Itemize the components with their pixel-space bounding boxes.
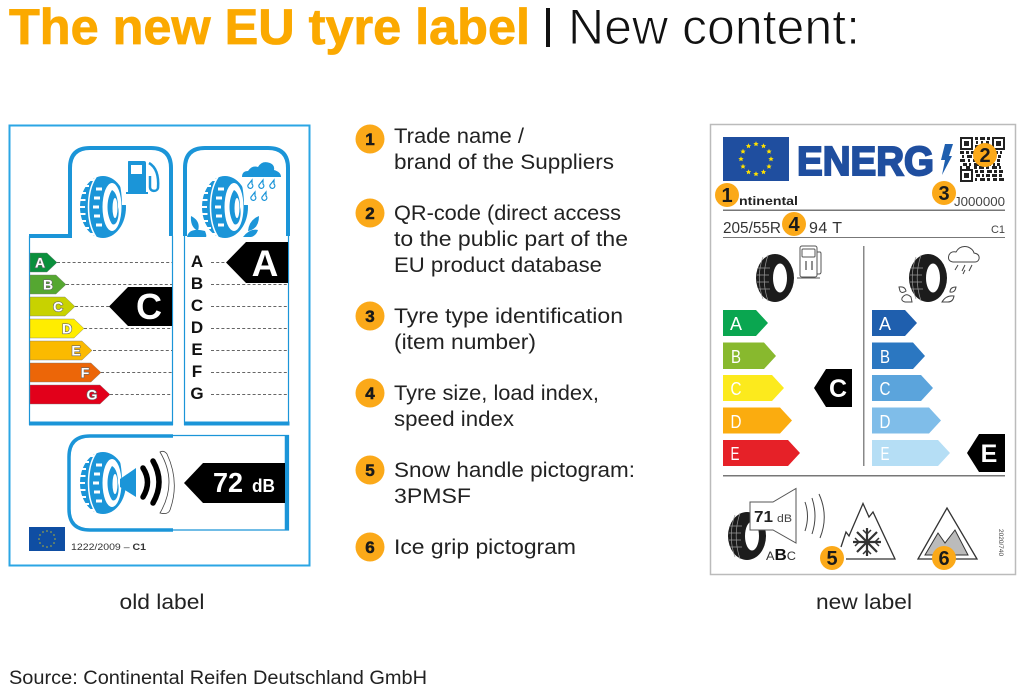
bar C: C xyxy=(53,298,63,314)
item 1: Trade name / xyxy=(394,124,524,148)
item 2: QR-code (direct access xyxy=(394,201,621,225)
bar C: C xyxy=(730,378,742,399)
wet grip scale A-G: A xyxy=(191,252,203,271)
wet grip scale A-E xyxy=(872,310,950,466)
noise rating arrow 72 dB: dB xyxy=(252,476,275,496)
item 1 xyxy=(356,124,614,174)
noise rating arrow 72 dB xyxy=(184,463,285,503)
icon: rain cloud xyxy=(948,247,979,274)
wet grip rating arrow A xyxy=(226,242,288,284)
icon: tyre (fuel) xyxy=(756,254,794,302)
bar B: B xyxy=(731,346,741,367)
bar A xyxy=(723,310,768,336)
icon: tyre (noise) xyxy=(79,450,129,514)
marker 3 xyxy=(932,181,956,205)
tyre size: 205/55R xyxy=(723,220,781,237)
fuel rating arrow C xyxy=(109,286,172,327)
item 5 xyxy=(356,456,635,508)
bar D xyxy=(872,408,941,434)
item 6: Ice grip pictogram xyxy=(394,535,576,559)
icon: fuel pump xyxy=(126,161,158,194)
QR code xyxy=(960,138,1004,181)
caption: new label: new label xyxy=(816,591,912,614)
noise rating arrow 72 dB: 72 xyxy=(213,467,243,498)
bar D xyxy=(30,319,84,338)
bar B: B xyxy=(43,276,53,292)
bar D xyxy=(723,408,792,434)
icon: speaker and sound waves xyxy=(120,451,174,514)
panel: new label xyxy=(710,124,1016,574)
fuel rating arrow C xyxy=(814,369,852,407)
bar A: A xyxy=(730,313,743,334)
fuel efficiency scale A-G xyxy=(30,253,110,404)
title: black part: New content: xyxy=(568,0,860,55)
fuel panel outline xyxy=(29,148,173,425)
marker 4: 4 xyxy=(788,214,800,236)
item 5: 5 xyxy=(365,461,375,480)
item 5: 3PMSF xyxy=(394,484,471,508)
icon: fuel pump xyxy=(797,246,821,278)
title xyxy=(9,0,860,55)
bar C xyxy=(723,375,784,401)
marker 1: 1 xyxy=(721,185,733,207)
bar A: A xyxy=(35,254,45,270)
item 2: to the public part of the xyxy=(394,227,628,251)
bar F: F xyxy=(81,364,90,380)
marker 6: 6 xyxy=(938,548,950,570)
energy wordmark: ENERG xyxy=(797,138,934,184)
bar E xyxy=(30,341,92,360)
bar C xyxy=(30,297,75,316)
marker 6 xyxy=(932,546,956,570)
marker 5 xyxy=(820,546,844,570)
item 3: 3 xyxy=(365,307,375,326)
icon: noise tyre and speaker: dB xyxy=(777,513,792,525)
item 6 xyxy=(356,532,576,562)
bar E: E xyxy=(880,443,890,464)
bar D: D xyxy=(730,411,742,432)
wet grip scale A-G: G xyxy=(190,384,204,403)
EU flag xyxy=(723,137,789,181)
caption: old label: old label xyxy=(120,591,204,614)
wet grip scale A-G: C xyxy=(191,296,203,315)
item 3: (item number) xyxy=(394,330,536,354)
bar A xyxy=(30,253,57,272)
wet grip scale A-G xyxy=(190,252,288,403)
icon: tyre (wet grip) xyxy=(909,254,947,302)
load and speed index: 94 T xyxy=(809,220,842,237)
wet grip rating arrow A: A xyxy=(252,243,278,284)
list of new content xyxy=(356,124,635,562)
item number: J000000 xyxy=(954,194,1005,209)
marker 4 xyxy=(782,212,806,236)
item 1: 1 xyxy=(365,130,375,149)
wet grip scale A-G: B xyxy=(191,274,203,293)
item 4: 4 xyxy=(365,384,375,403)
title: separator bar xyxy=(546,8,550,47)
supplier name: ntinental xyxy=(739,196,798,208)
new label frame xyxy=(710,124,1016,574)
old label frame xyxy=(10,126,310,566)
icon: noise tyre and speaker: 71 xyxy=(754,509,773,526)
bar G: G xyxy=(87,386,98,402)
fuel efficiency dashed lines xyxy=(57,262,172,394)
item 3: Tyre type identification xyxy=(394,304,623,328)
bar B xyxy=(30,275,66,294)
marker 2 xyxy=(973,143,997,167)
title: orange part: The new EU tyre label xyxy=(9,0,530,55)
icon: ice grip mountain xyxy=(918,508,977,559)
item 1: brand of the Suppliers xyxy=(394,150,614,174)
bar D: D xyxy=(62,320,72,336)
icon: tyre (fuel) xyxy=(79,174,129,238)
EU flag small xyxy=(29,527,65,551)
icon: lightning bolt xyxy=(941,144,953,175)
tyre class: C1 xyxy=(991,224,1005,236)
fuel efficiency scale A-E xyxy=(723,310,800,466)
central divider xyxy=(863,246,864,466)
icon: water splash xyxy=(899,287,956,302)
source: Source: Continental Reifen Deutschland GmbH xyxy=(9,668,427,689)
bar D: D xyxy=(880,411,890,432)
bar G xyxy=(30,385,110,404)
bar E xyxy=(872,440,950,466)
item 4 xyxy=(356,378,599,431)
wet grip rating arrow E xyxy=(967,434,1005,472)
wet grip panel outline xyxy=(184,148,290,425)
bar B xyxy=(872,342,925,369)
bar F xyxy=(30,363,101,382)
marker 3: 3 xyxy=(938,183,950,205)
icon: tyre (wet grip) xyxy=(201,174,251,238)
item 2: 2 xyxy=(365,204,375,223)
icon: rain cloud xyxy=(242,162,281,200)
wet grip scale A-G: E xyxy=(191,340,203,359)
icon: water splash xyxy=(187,216,259,237)
marker 5: 5 xyxy=(826,548,838,570)
bar A: A xyxy=(879,313,892,334)
panel: old label xyxy=(10,126,310,566)
icon: snow mountain (3PMSF) xyxy=(841,504,895,559)
bar C xyxy=(872,375,933,401)
divider xyxy=(723,237,1005,238)
bar E xyxy=(723,440,800,466)
divider xyxy=(723,475,1005,476)
bar E: E xyxy=(730,443,740,464)
wet grip rating arrow E: E xyxy=(981,440,997,468)
fuel rating arrow C: C xyxy=(136,286,162,327)
bar E: E xyxy=(71,342,81,358)
regulation number: 1222/2009 – C1 xyxy=(71,542,147,553)
wet grip scale A-G: F xyxy=(192,362,202,381)
bar B: B xyxy=(880,346,890,367)
bar C: C xyxy=(880,378,890,399)
item 4: Tyre size, load index, xyxy=(394,381,599,405)
wet grip scale A-G: D xyxy=(191,318,203,337)
marker 2: 2 xyxy=(979,145,991,167)
divider xyxy=(723,210,1005,211)
item 3 xyxy=(356,302,623,354)
noise panel outline xyxy=(69,436,288,530)
item 4: speed index xyxy=(394,407,514,431)
noise class ABC: ABC xyxy=(766,547,796,564)
item 2: EU product database xyxy=(394,253,602,277)
item 2 xyxy=(356,198,628,277)
regulation number: 2020/740 xyxy=(997,529,1004,556)
item 5: Snow handle pictogram: xyxy=(394,458,635,482)
item 6: 6 xyxy=(365,538,375,557)
bar B xyxy=(723,342,776,369)
icon: noise tyre and speaker xyxy=(728,488,824,560)
marker 1 xyxy=(715,183,739,207)
bar A xyxy=(872,310,917,336)
fuel rating arrow C: C xyxy=(829,375,847,403)
